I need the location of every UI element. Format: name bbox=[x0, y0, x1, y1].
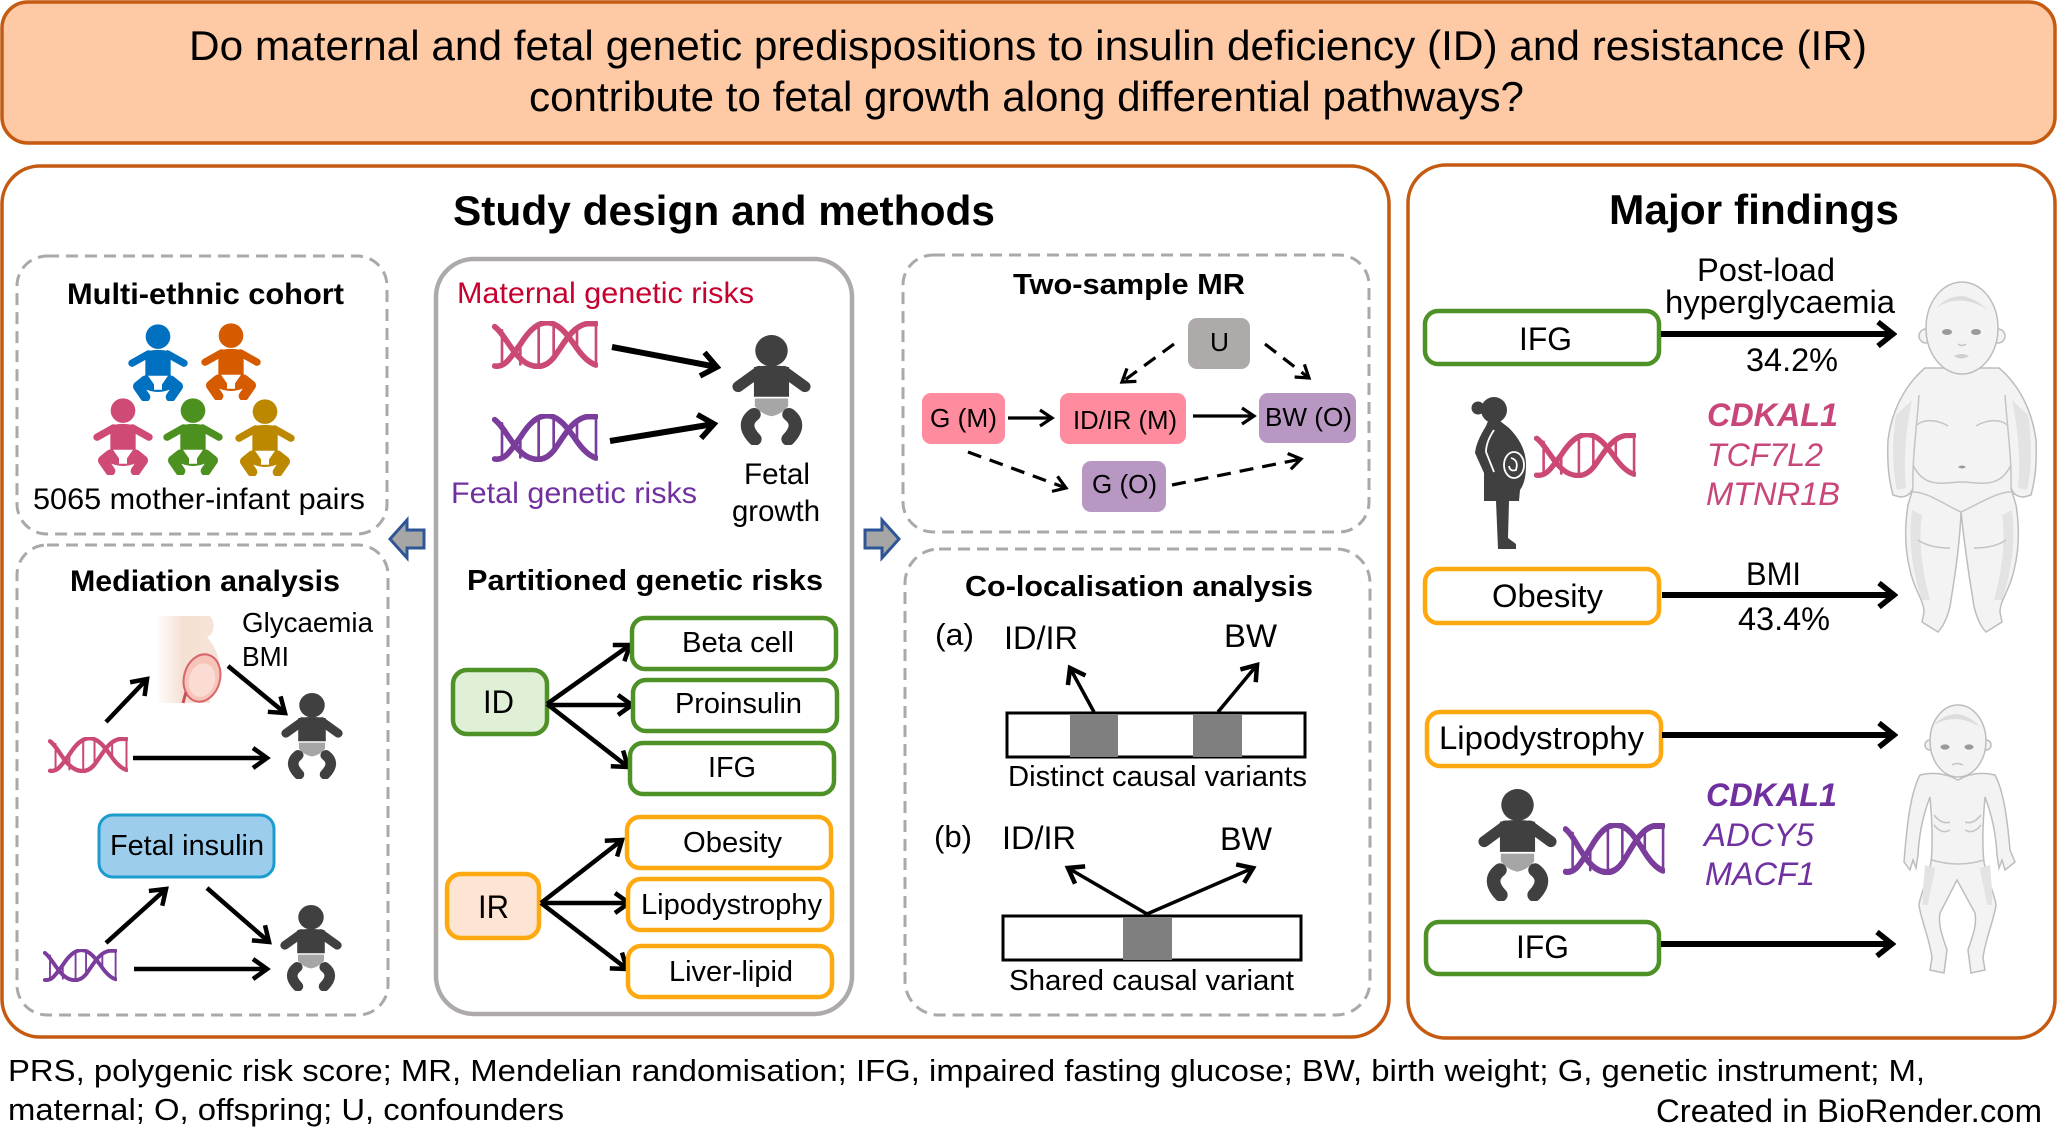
node: fetal insulin bbox=[99, 815, 274, 877]
diagram: shared causal variant: ID/IR bbox=[1002, 820, 1076, 856]
icon: fetal DNA bbox=[1566, 825, 1663, 872]
label: fetal growth: Fetal bbox=[744, 458, 810, 491]
box: IFG (maternal): IFG bbox=[1519, 321, 1572, 357]
heading: two-sample MR: Two-sample MR bbox=[1013, 269, 1245, 301]
text: maternal genes: TCF7L2 bbox=[1707, 437, 1823, 473]
arrow: fetal risk to growth bbox=[610, 424, 714, 441]
text: maternal genes: MTNR1B bbox=[1706, 476, 1840, 512]
panel: genetic risks bbox=[436, 259, 852, 1014]
text: maternal genes: CDKAL1 bbox=[1707, 397, 1838, 433]
banner: research question: Do maternal and fetal genetic predispositions to insulin deficiency (ID) and resistance (IR) bbox=[189, 22, 1867, 69]
arrow: mother to baby bbox=[228, 666, 285, 713]
illustration: large baby bbox=[1888, 282, 2036, 632]
footnote: abbreviations: maternal; O, offspring; U, confounders bbox=[8, 1092, 564, 1127]
box: obesity bbox=[627, 817, 831, 868]
label: maternal genetic risks: Maternal genetic risks bbox=[457, 277, 754, 310]
number: 34.2%: 34.2% bbox=[1746, 342, 1838, 378]
node: U: U bbox=[1210, 327, 1229, 357]
arrow: U to BW(O) bbox=[1265, 344, 1309, 378]
illustration: thin baby bbox=[1904, 705, 2015, 973]
arrow: fetal insulin to baby bbox=[207, 888, 269, 942]
box: beta cell bbox=[632, 618, 836, 669]
heading: co-localisation analysis: Co-localisation analysis bbox=[965, 571, 1313, 603]
footnote: abbreviations bbox=[8, 1053, 1925, 1127]
banner: research question bbox=[2, 2, 2055, 143]
icon: pregnant abdomen with fetus bbox=[157, 616, 226, 706]
diagram: distinct causal variants: Distinct causal variants bbox=[1008, 761, 1307, 793]
node: G (O) bbox=[1082, 461, 1166, 512]
label: post-load hyperglycaemia: Post-load bbox=[1697, 252, 1835, 288]
text: fetal genes bbox=[1702, 777, 1837, 892]
panel: multi-ethnic cohort bbox=[17, 256, 387, 534]
text: fetal genes: MACF1 bbox=[1705, 856, 1815, 892]
diagram: distinct causal variants: ID/IR bbox=[1004, 620, 1078, 656]
diagram: distinct causal variants: (a) bbox=[935, 617, 974, 652]
icon: five coloured babies bbox=[97, 323, 291, 472]
arrow: block arrow right bbox=[865, 520, 899, 558]
icon: maternal DNA bbox=[1537, 435, 1634, 476]
box: lipodystrophy (fetal): Lipodystrophy bbox=[1439, 720, 1644, 756]
box: liver-lipid bbox=[628, 946, 832, 997]
box: IFG: IFG bbox=[708, 752, 756, 784]
box: proinsulin: Proinsulin bbox=[675, 688, 802, 720]
box: obesity (maternal): Obesity bbox=[1492, 578, 1603, 614]
heading: mediation analysis: Mediation analysis bbox=[70, 565, 340, 598]
credit: BioRender: Created in BioRender.com bbox=[1656, 1093, 2042, 1129]
icon: fetal DNA bbox=[495, 416, 596, 459]
arrows: ID to clusters bbox=[547, 645, 632, 767]
arrow: maternal DNA to mother bbox=[106, 679, 147, 722]
node: G (M): G (M) bbox=[930, 403, 997, 433]
box: obesity: Obesity bbox=[683, 827, 782, 859]
arrow: IFG to large baby bbox=[1661, 331, 1893, 337]
node: IR: IR bbox=[478, 889, 509, 925]
node: G (M) bbox=[922, 393, 1005, 444]
node: ID/IR (M): ID/IR (M) bbox=[1073, 405, 1177, 435]
panel: major findings bbox=[1408, 165, 2055, 1038]
panel: two-sample MR bbox=[903, 255, 1369, 532]
node: BW (O) bbox=[1259, 393, 1356, 443]
icon: baby bbox=[286, 693, 338, 774]
footnote: abbreviations: PRS, polygenic risk score; MR, Mendelian randomisation; IFG, impaired fasting glucose; BW, birth weight; G, genetic instrument; M, bbox=[8, 1053, 1925, 1088]
icon: baby bbox=[285, 905, 337, 986]
banner: research question: contribute to fetal growth along differential pathways? bbox=[529, 73, 1524, 120]
number: 43.4%: 43.4% bbox=[1738, 601, 1830, 637]
arrow: U to ID/IR(M) bbox=[1122, 344, 1174, 382]
heading: partitioned genetic risks: Partitioned genetic risks bbox=[467, 565, 823, 597]
box: beta cell: Beta cell bbox=[682, 627, 794, 659]
node: G (O): G (O) bbox=[1092, 469, 1157, 499]
box: IFG (fetal): IFG bbox=[1516, 929, 1569, 965]
box: liver-lipid: Liver-lipid bbox=[669, 956, 793, 988]
arrow: maternal risk to growth bbox=[612, 347, 717, 367]
arrow: G(M) to ID/IR(M) bbox=[1008, 416, 1052, 420]
arrow: ID/IR(M) to BW(O) bbox=[1193, 414, 1254, 418]
label: glycaemia: Glycaemia bbox=[242, 607, 373, 638]
label: BMI: BMI bbox=[242, 641, 289, 672]
arrow: fetal DNA to fetal insulin bbox=[106, 889, 166, 943]
arrow: obesity to large baby bbox=[1662, 592, 1894, 598]
icon: baby bbox=[1484, 789, 1551, 895]
label: fetal growth bbox=[732, 458, 820, 528]
diagram: shared causal variant: BW bbox=[1220, 821, 1273, 857]
diagram: shared causal variant: (b) bbox=[934, 819, 972, 854]
box: lipodystrophy: Lipodystrophy bbox=[641, 889, 822, 921]
label: post-load hyperglycaemia: hyperglycaemia bbox=[1665, 284, 1895, 320]
node: ID: ID bbox=[483, 684, 514, 720]
heading: study design and methods: Study design and methods bbox=[453, 187, 995, 234]
arrow: lipodystrophy to thin baby bbox=[1662, 732, 1894, 738]
arrow: block arrow left bbox=[390, 520, 424, 558]
icon: fetal DNA bbox=[45, 950, 116, 980]
diagram: shared causal variant bbox=[934, 819, 1301, 997]
diagram: distinct causal variants bbox=[935, 617, 1307, 793]
heading: multi-ethnic cohort: Multi-ethnic cohort bbox=[67, 278, 344, 311]
panel: mediation analysis bbox=[17, 545, 388, 1015]
panel: study design and methods bbox=[2, 166, 1389, 1037]
node: ID bbox=[453, 670, 547, 734]
arrow: maternal DNA to baby bbox=[133, 756, 267, 760]
arrow: IFG to thin baby bbox=[1661, 941, 1892, 947]
box: proinsulin bbox=[633, 680, 837, 731]
text: sample size: 5065 mother-infant pairs bbox=[33, 483, 365, 516]
label: fetal genetic risks: Fetal genetic risks bbox=[451, 477, 697, 510]
icon: maternal DNA bbox=[495, 323, 596, 366]
label: post-load hyperglycaemia bbox=[1665, 252, 1895, 320]
panel: co-localisation analysis bbox=[905, 549, 1370, 1015]
text: fetal genes: ADCY5 bbox=[1702, 817, 1814, 853]
diagram: shared causal variant: Shared causal variant bbox=[1009, 965, 1294, 997]
heading: major findings: Major findings bbox=[1609, 186, 1899, 233]
node: ID/IR (M) bbox=[1060, 393, 1186, 444]
box: IFG (maternal) bbox=[1425, 311, 1659, 364]
node: U bbox=[1188, 318, 1250, 369]
box: obesity (maternal) bbox=[1425, 569, 1659, 623]
label: BMI: BMI bbox=[1746, 556, 1801, 592]
text: maternal genes bbox=[1706, 397, 1840, 512]
text: fetal genes: CDKAL1 bbox=[1706, 777, 1837, 813]
arrow: G(O) to BW(O) bbox=[1172, 459, 1301, 485]
icon: maternal DNA bbox=[50, 738, 126, 771]
box: IFG (fetal) bbox=[1426, 922, 1659, 974]
node: IR bbox=[447, 874, 539, 938]
arrow: G(M) to G(O) bbox=[968, 452, 1066, 488]
node: fetal insulin: Fetal insulin bbox=[110, 830, 264, 862]
box: IFG bbox=[630, 743, 834, 794]
label: fetal growth: growth bbox=[732, 495, 820, 528]
icon: pregnant woman bbox=[1472, 397, 1526, 549]
diagram: distinct causal variants: BW bbox=[1224, 618, 1278, 654]
arrow: fetal DNA to baby bbox=[134, 967, 267, 971]
node: BW (O): BW (O) bbox=[1265, 402, 1352, 432]
box: lipodystrophy bbox=[628, 879, 832, 930]
icon: baby bbox=[738, 335, 805, 439]
arrows: IR to clusters bbox=[541, 840, 629, 969]
box: lipodystrophy (fetal) bbox=[1427, 712, 1661, 766]
